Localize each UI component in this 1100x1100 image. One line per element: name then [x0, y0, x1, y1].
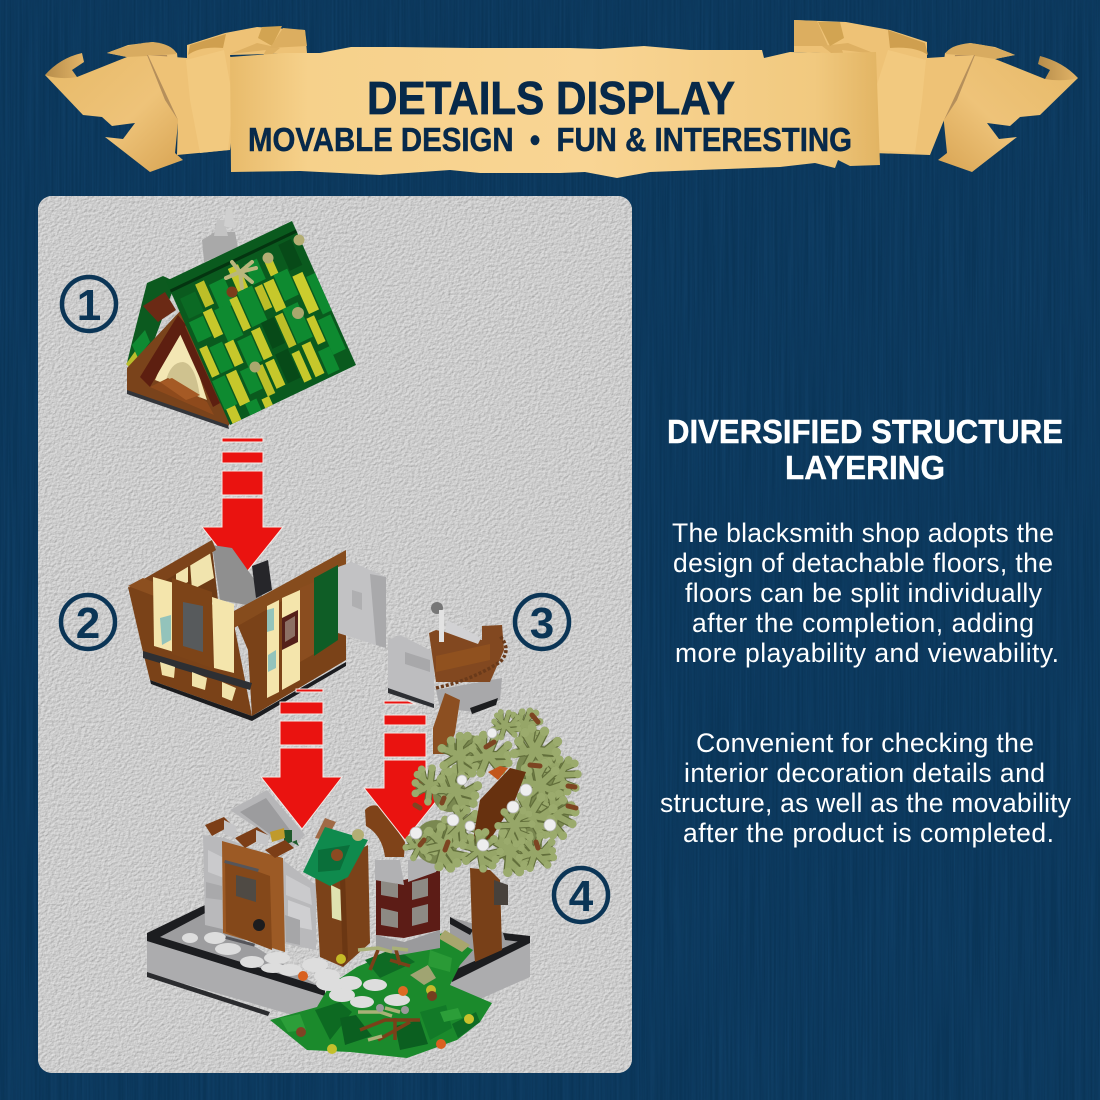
bracket	[433, 693, 460, 754]
timber beams	[140, 315, 186, 387]
foliage sprigs	[399, 703, 585, 887]
panel: textured grey card	[38, 196, 632, 1073]
trunk	[470, 868, 502, 962]
text block: convenience description: after the product is completed.	[683, 818, 1054, 848]
interior and back wall	[136, 548, 218, 612]
text block: convenience description	[660, 728, 1072, 848]
text block: blacksmith shop description: after the completion, adding	[692, 608, 1034, 638]
ornate window	[172, 578, 212, 668]
model part 1: roof	[126, 209, 356, 429]
ground bricks	[280, 930, 480, 1050]
roof beams	[205, 817, 232, 836]
shutter	[300, 582, 314, 662]
arrow 1: red down arrow	[202, 438, 283, 578]
badge 2: 2	[76, 599, 100, 648]
floor step	[150, 378, 214, 415]
tree	[399, 703, 585, 962]
grey wall block	[388, 635, 434, 707]
roof plane with shingles	[166, 221, 356, 425]
arrow 3: red down arrow	[364, 701, 446, 840]
text block: blacksmith shop description: The blacksmith shop adopts the	[672, 518, 1054, 548]
timber posts	[315, 845, 370, 967]
chimney	[202, 209, 238, 262]
arrow 2: red down arrow	[261, 689, 342, 829]
stone wall	[203, 835, 316, 950]
stepping stones	[182, 932, 410, 1008]
roof plant and studs	[226, 234, 304, 372]
back top beam	[128, 540, 216, 598]
scroll: left curls	[45, 26, 307, 172]
badge 1: 1	[77, 281, 101, 330]
chain	[436, 636, 506, 688]
scroll: main parchment	[230, 46, 880, 178]
text block: convenience description: Convenient for checking the	[696, 728, 1034, 758]
text block: blacksmith shop description: design of detachable floors, the	[673, 548, 1053, 578]
foliage under layer	[414, 735, 570, 867]
base left wall	[147, 937, 325, 1022]
curved post	[365, 805, 405, 857]
text block: convenience description: interior decoration details and	[684, 758, 1045, 788]
green ground	[270, 933, 492, 1058]
badge 4	[554, 868, 608, 922]
base inner floor	[150, 908, 325, 990]
badge 1	[62, 277, 116, 331]
text block: blacksmith shop description	[672, 518, 1059, 668]
badge 4: 4	[569, 872, 594, 921]
heading: diversified structure layering	[667, 413, 1063, 486]
text block: convenience description: structure, as well as the movability	[660, 788, 1072, 818]
small plants	[360, 950, 420, 1040]
small window	[282, 610, 298, 650]
banner: parchment scroll	[45, 20, 1078, 178]
anvil and tool	[445, 620, 481, 644]
small green canopy	[303, 818, 368, 886]
badge 2	[61, 595, 115, 649]
bottle and mug	[270, 828, 299, 846]
badge 3: 3	[530, 599, 554, 648]
model part 2: timber-frame floor	[128, 540, 346, 721]
left slope foliage	[127, 276, 176, 378]
model part 4: ground floor with tree	[147, 790, 530, 1058]
heading: diversified structure layering: LAYERING	[785, 449, 945, 486]
gable wall	[127, 310, 240, 427]
detached grey wall panel	[338, 562, 386, 648]
turret body	[436, 678, 502, 712]
black ledge and lower arches	[143, 651, 252, 690]
badge 3	[515, 595, 569, 649]
banner subheading: MOVABLE DESIGN • FUN & INTERESTING	[248, 121, 852, 158]
banner heading: DETAILS DISPLAY	[367, 72, 735, 124]
helmet figure	[252, 560, 272, 598]
left wall	[128, 587, 252, 716]
text block: blacksmith shop description: more playability and viewability.	[675, 638, 1059, 668]
green door	[314, 565, 338, 656]
base right wall	[450, 940, 530, 1008]
wooden door	[222, 841, 285, 952]
back stone wall	[230, 790, 305, 850]
base strip	[127, 390, 229, 429]
white flowers	[410, 728, 556, 851]
foreground sprigs	[451, 707, 539, 882]
bay window	[375, 858, 440, 955]
brown twigs	[415, 715, 576, 850]
text block: blacksmith shop description: floors can be split individually	[685, 578, 1043, 608]
cream plaster panels	[153, 577, 174, 652]
upper trunk	[472, 768, 526, 845]
scroll: right curls	[794, 20, 1078, 172]
heading: diversified structure layering: DIVERSIFIED STRUCTURE	[667, 413, 1063, 450]
right wall	[232, 552, 346, 716]
model part 3: side turret	[388, 602, 506, 754]
colored studs	[296, 954, 474, 1054]
